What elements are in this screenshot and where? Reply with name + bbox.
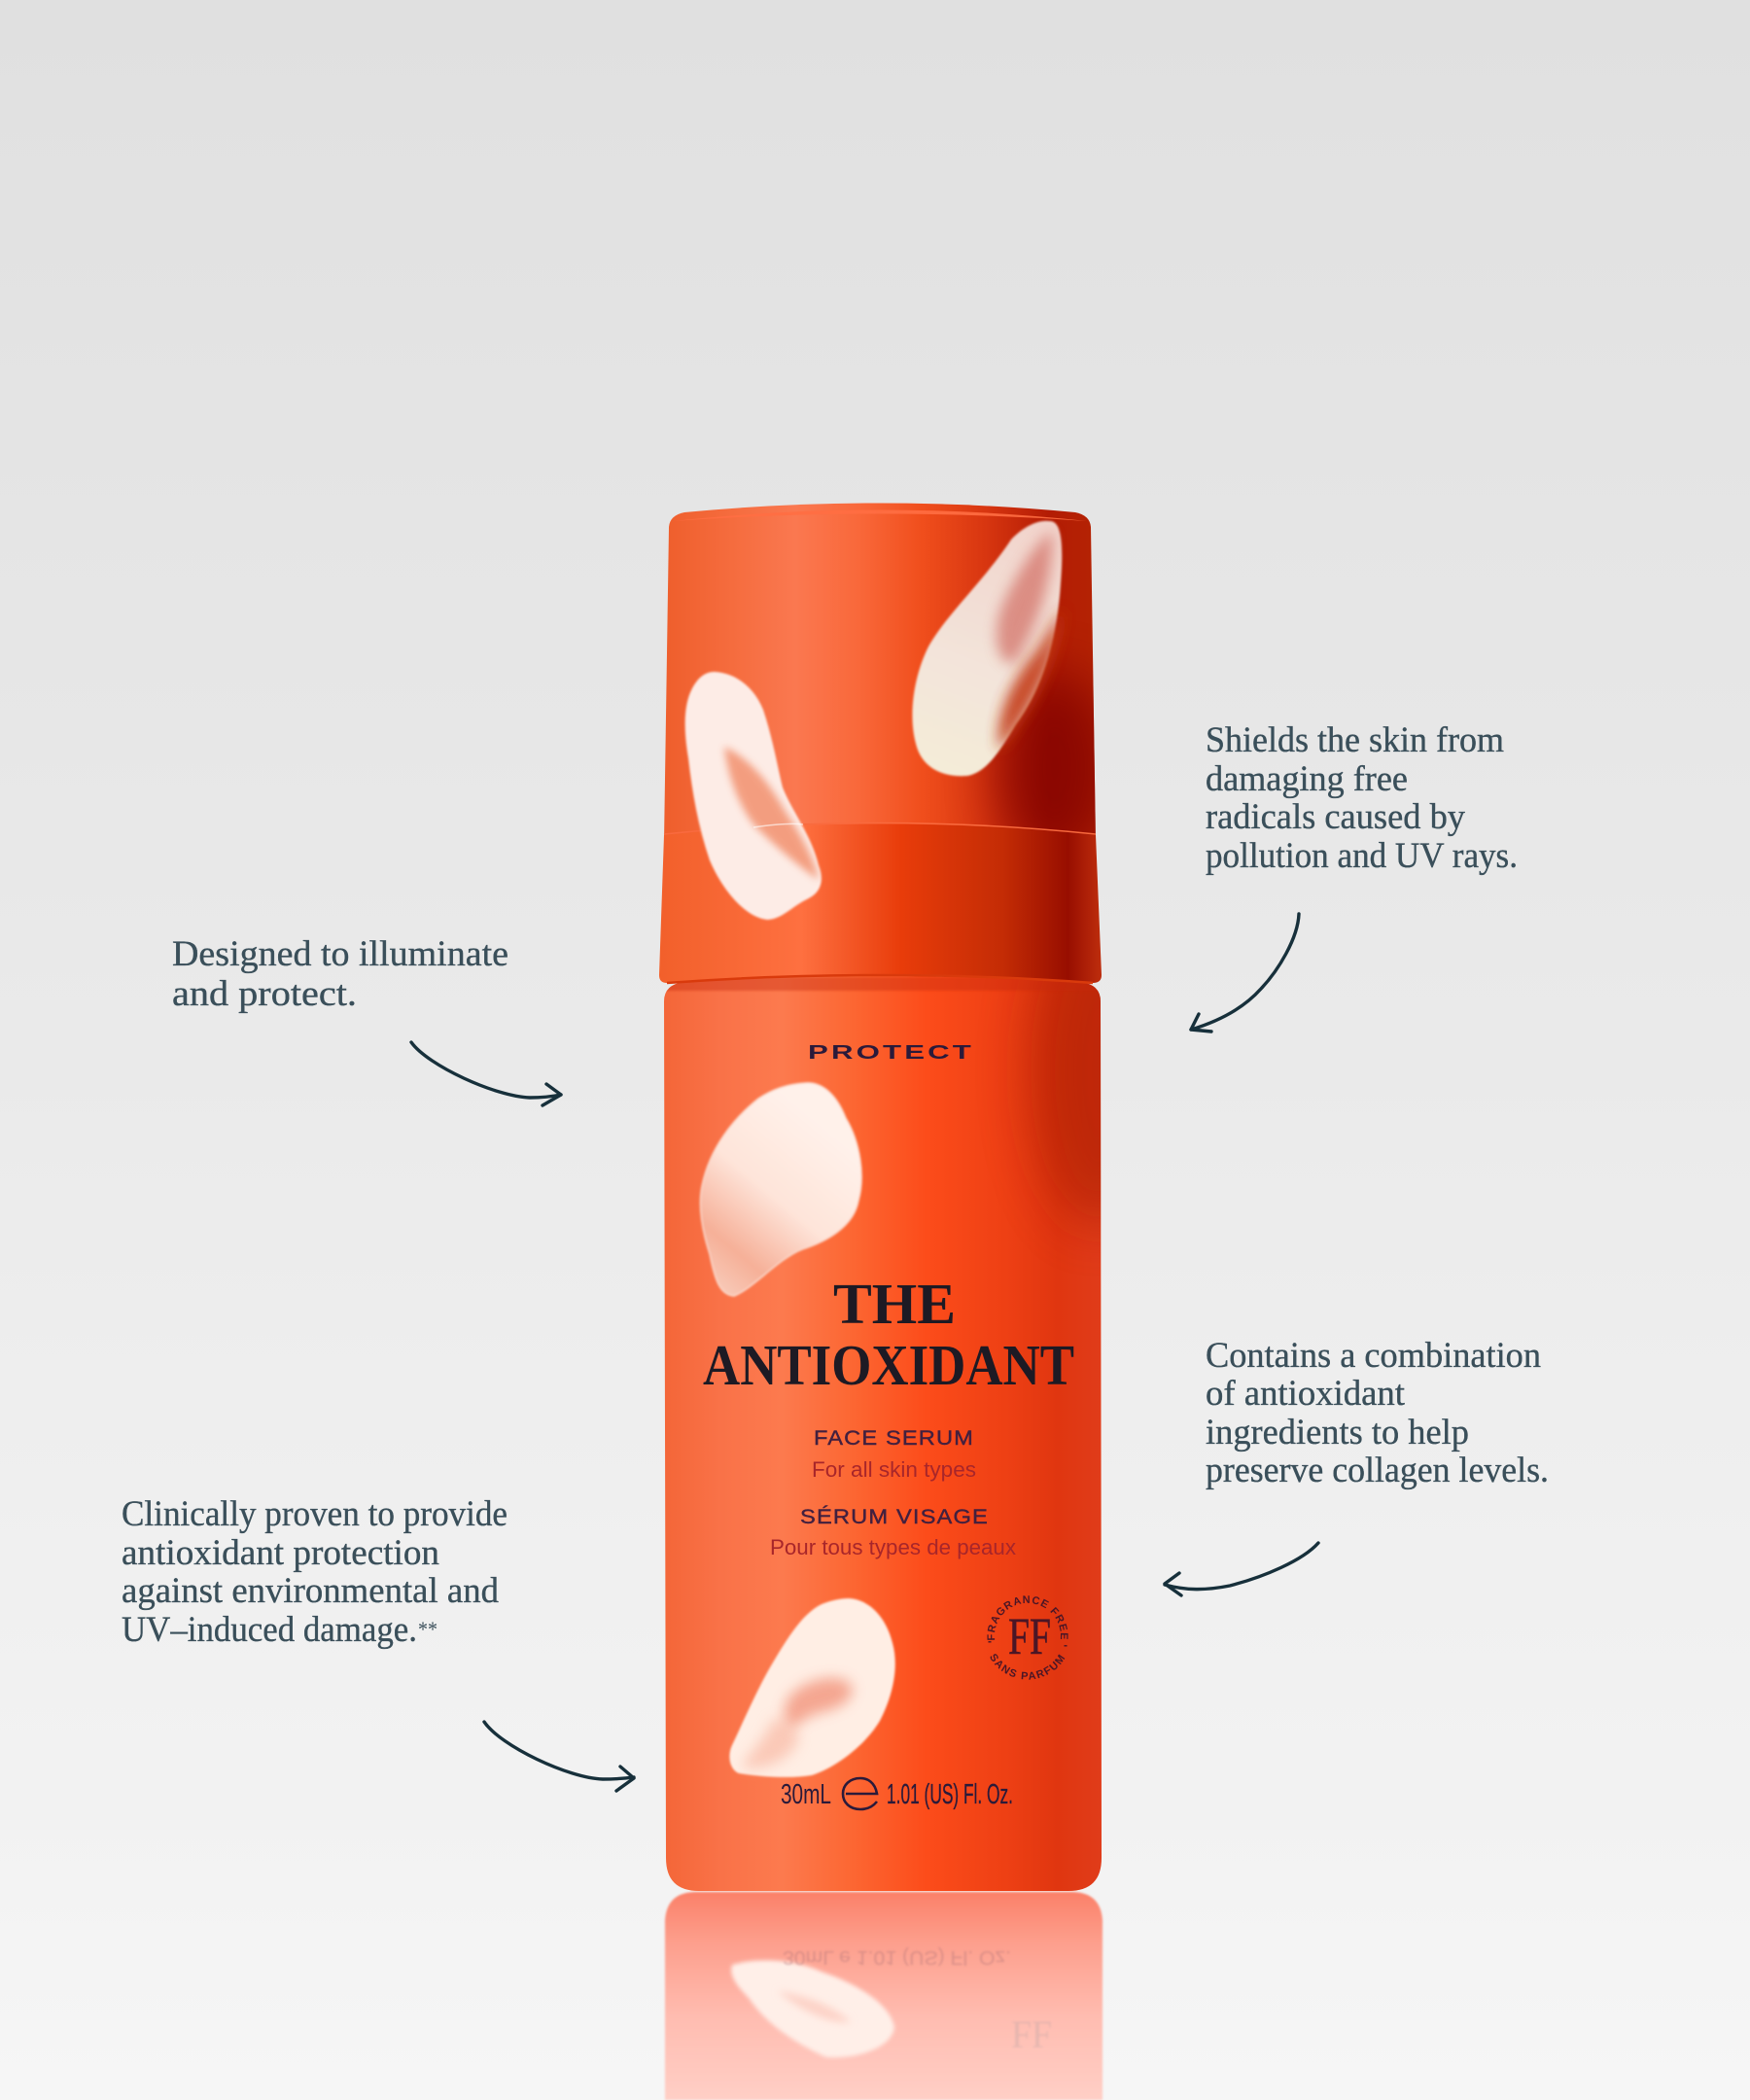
volume label (781, 1778, 1013, 1810)
cap shading (673, 509, 1113, 865)
badge: fragrance free: - (988, 1634, 992, 1648)
callout: antioxidant combination: ingredients to help (1206, 1413, 1469, 1452)
volume label: 1.01 (US) Fl. Oz. (887, 1779, 1013, 1810)
product name: ANTIOXIDANT (703, 1333, 1074, 1397)
product type text: SÉRUM VISAGE (800, 1506, 989, 1528)
label: PROTECT: PROTECT (808, 1042, 974, 1064)
collar lip (667, 975, 1093, 983)
arrow: designed to illuminate (411, 1042, 561, 1105)
reflection of bottle: FF (1011, 2012, 1052, 2056)
callout: clinically proven: UV–induced damage. (122, 1610, 417, 1650)
arrow: antioxidant combination (1165, 1543, 1318, 1595)
callout: shields the skin (1206, 720, 1518, 876)
callout: shields the skin: damaging free (1206, 759, 1408, 799)
bottle body shading (664, 914, 1167, 1225)
callout: antioxidant combination: of antioxidant (1206, 1374, 1406, 1414)
callout: designed to illuminate (172, 934, 508, 1014)
cream smear: body upper (700, 1083, 861, 1296)
bottle cap (664, 504, 1096, 842)
product name: THE (833, 1272, 956, 1336)
badge: fragrance free: FF (1008, 1607, 1051, 1665)
volume label: 30mL (781, 1779, 831, 1810)
bottle collar (659, 824, 1102, 983)
callout: shields the skin: radicals caused by (1206, 797, 1465, 837)
product type text: Pour tous types de peaux (770, 1535, 1017, 1559)
badge: fragrance free (987, 1595, 1068, 1680)
callout: antioxidant combination: preserve collagen levels. (1206, 1451, 1549, 1490)
callout: designed to illuminate: and protect. (172, 974, 357, 1014)
reflection of bottle (665, 1892, 1102, 2100)
bottle (620, 504, 1206, 1891)
callout: clinically proven: against environmental and (122, 1571, 499, 1611)
arrow: clinically proven (484, 1722, 634, 1791)
callout: clinically proven: ** (418, 1617, 438, 1641)
bottle body (664, 976, 1102, 1891)
callout: designed to illuminate: Designed to illuminate (172, 934, 508, 974)
collar seam (664, 822, 1096, 834)
cream smear: cap right (912, 521, 1064, 776)
badge: fragrance free: FRAGRANCE FREE (987, 1595, 1068, 1640)
product name (703, 1272, 1074, 1397)
product type text (770, 1427, 1017, 1559)
cream smear: body lower (729, 1598, 895, 1777)
product type text: FACE SERUM (814, 1427, 974, 1450)
callout: antioxidant combination (1206, 1336, 1549, 1490)
callout: shields the skin: pollution and UV rays. (1206, 836, 1518, 876)
cream smear: cap left (685, 672, 822, 920)
reflection of bottle: 30mL e 1.01 (US) Fl. Oz. (783, 1946, 1011, 1968)
callout: clinically proven (122, 1494, 508, 1650)
badge: fragrance free: SANS PARFUM (990, 1654, 1066, 1680)
callout: antioxidant combination: Contains a combination (1206, 1336, 1541, 1376)
badge: fragrance free: - (1064, 1638, 1068, 1652)
callout: clinically proven: antioxidant protection (122, 1533, 439, 1573)
callout: shields the skin: Shields the skin from (1206, 720, 1504, 760)
arrow: shields the skin (1191, 914, 1299, 1032)
product type text: For all skin types (812, 1457, 976, 1482)
callout: clinically proven: Clinically proven to provide (122, 1494, 508, 1534)
